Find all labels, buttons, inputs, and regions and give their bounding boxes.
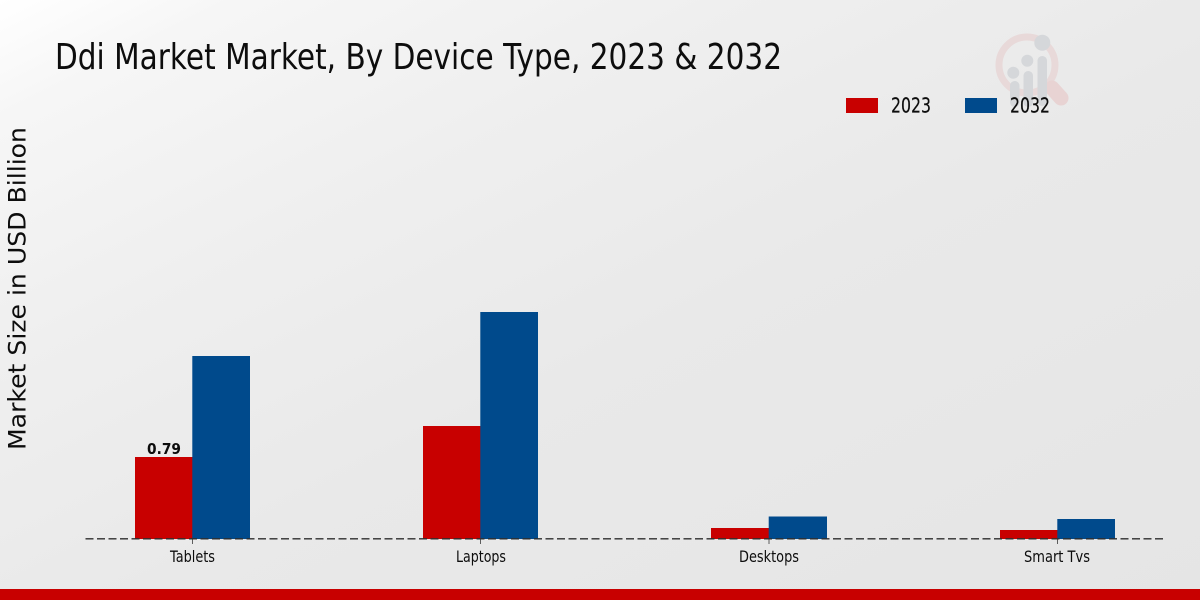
baseline axis <box>86 538 1164 540</box>
legend item: 2032: 2032 <box>1010 94 1050 118</box>
category label: Smart Tvs: Smart Tvs <box>1024 547 1090 566</box>
category label: Laptops: Laptops <box>456 547 506 566</box>
y axis label: Market Size in USD Billion <box>4 127 32 450</box>
legend <box>846 94 1050 118</box>
legend item: 2032 <box>965 94 1050 118</box>
bars: Desktops <box>711 516 827 539</box>
category label: Tablets: Tablets <box>169 547 215 566</box>
legend item: 2023 <box>846 94 931 118</box>
icon: watermark logo <box>999 35 1061 107</box>
bar chart <box>86 312 1164 566</box>
bars: Tablets <box>135 356 250 539</box>
category label: Desktops: Desktops <box>739 547 799 566</box>
title: Ddi Market Market, By Device Type, 2023 & 2032 <box>55 37 782 78</box>
footer bar <box>0 589 1200 600</box>
tick marks <box>192 539 1058 544</box>
legend item: 2023: 2023 <box>891 94 931 118</box>
data label: 0.79: 0.79 <box>147 440 181 458</box>
bars: Laptops <box>423 312 538 539</box>
bars: Smart Tvs <box>1000 519 1115 539</box>
